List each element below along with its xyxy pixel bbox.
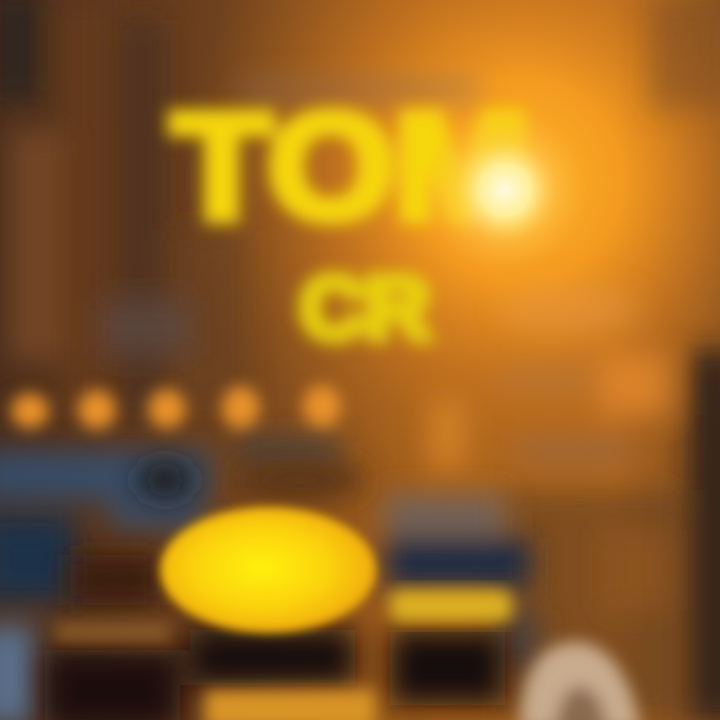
- lower scene: dark cups: [45, 460, 505, 720]
- pale object bottom right: [520, 642, 640, 720]
- light glare: [420, 105, 590, 275]
- cup bands: [55, 622, 375, 720]
- row of five glowing dots: [11, 385, 341, 430]
- main yellow ellipse: [160, 507, 376, 633]
- lower scene: blue surfaces: [0, 440, 540, 720]
- subtitle: CR: CR: [300, 258, 430, 357]
- right cup yellow band: [390, 590, 512, 622]
- title: TOM: TOM: [172, 82, 530, 250]
